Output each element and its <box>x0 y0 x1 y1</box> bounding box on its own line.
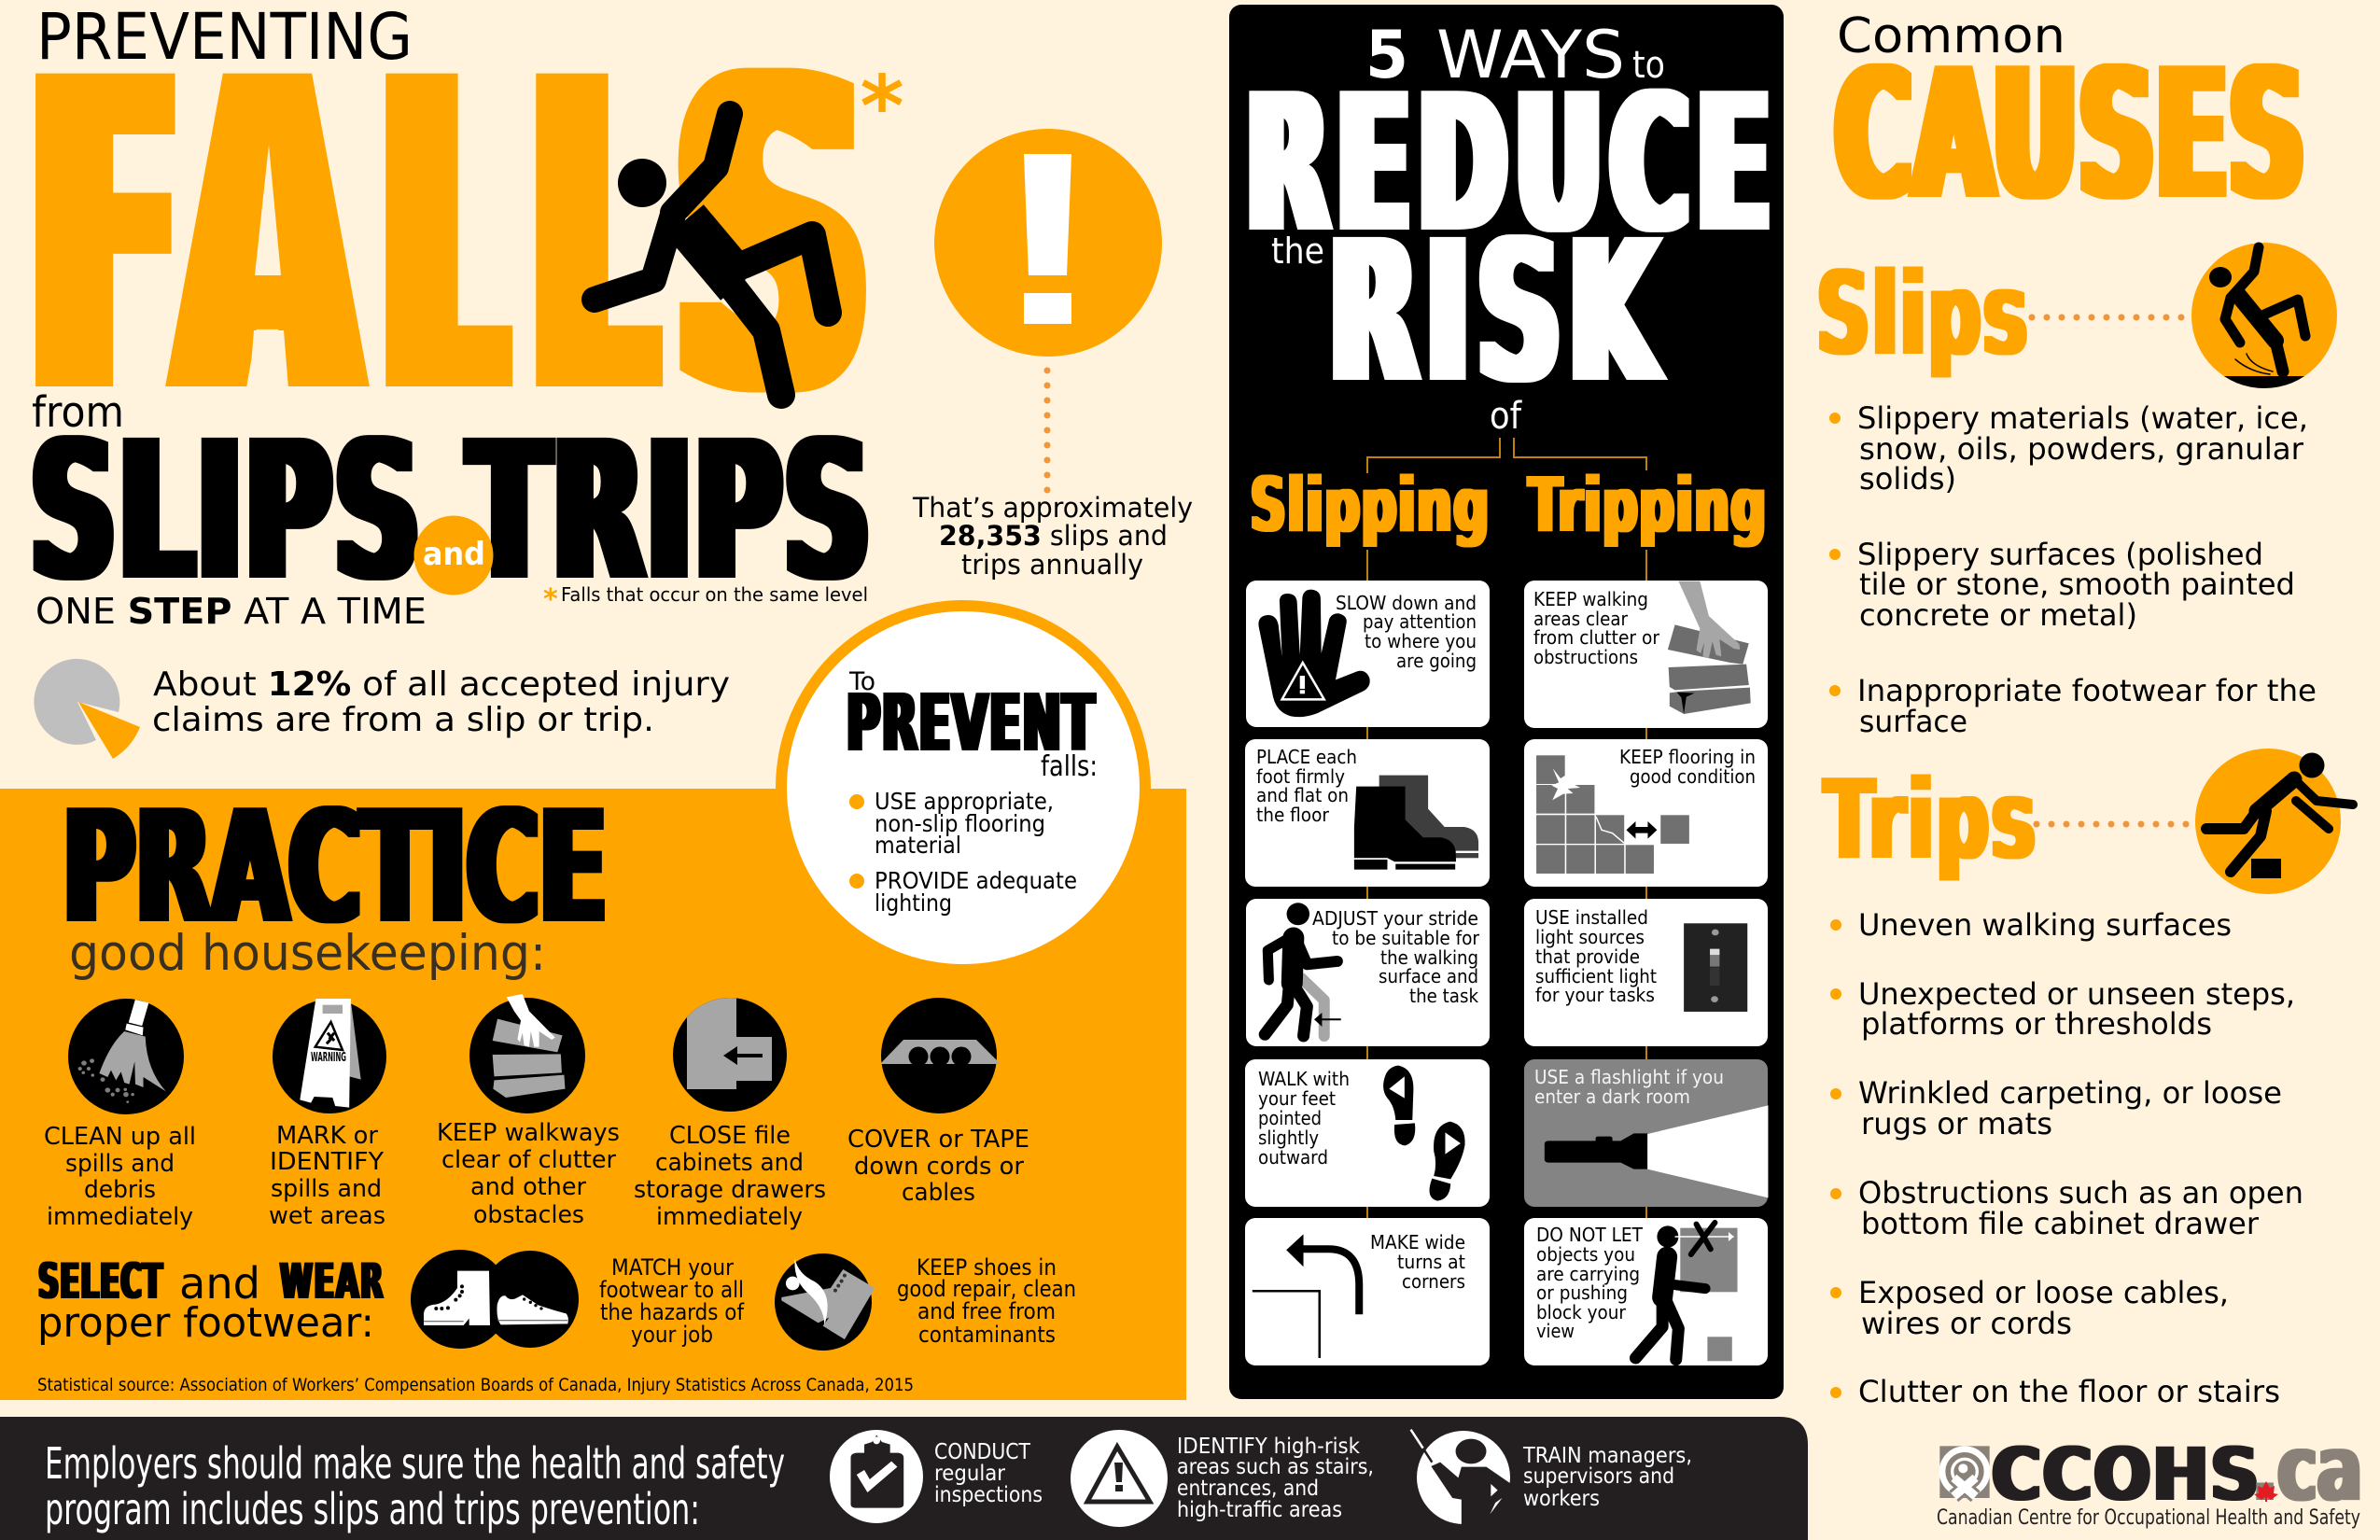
text: conduct: inspections <box>934 1483 1043 1507</box>
icon: warning sign <box>273 999 386 1113</box>
card: slow down: pay attention <box>1363 610 1477 633</box>
heading: select and wear: proper footwear: <box>37 1299 374 1347</box>
prevent circle <box>776 600 1151 975</box>
employers heading <box>45 1438 785 1534</box>
label: mark: wet areas <box>269 1202 385 1230</box>
icon: cable cover <box>880 998 1001 1113</box>
label: keep walkways: KEEP walkways <box>437 1119 620 1147</box>
card: adjust stride: to be suitable for <box>1332 927 1480 949</box>
heading: 5 ways to: WAYS <box>1436 17 1625 93</box>
card: keep flooring: KEEP flooring in <box>1619 746 1756 768</box>
label: clean <box>44 1123 196 1231</box>
list: trip causes: Uneven walking surfaces <box>1858 907 2232 943</box>
prevent circle: material <box>875 832 961 859</box>
panel: practice <box>0 600 1186 1400</box>
tagline: ONE STEP AT A TIME <box>35 591 427 632</box>
text: conduct <box>934 1440 1043 1507</box>
text: identify: entrances, and <box>1177 1477 1319 1501</box>
dotted connector: trips <box>2037 821 2193 827</box>
list: slip causes: surface <box>1859 704 1967 739</box>
list: trip causes: Exposed or loose cables, <box>1858 1275 2229 1310</box>
card: adjust stride: the walking <box>1380 946 1478 969</box>
card: walk with feet outward: WALK with <box>1258 1068 1350 1090</box>
heading: common: Common <box>1837 8 2065 64</box>
label: keep walkways: obstacles <box>473 1201 584 1229</box>
card: keep walking areas clear: from clutter or <box>1533 626 1660 649</box>
card: light sources: light sources <box>1535 926 1645 948</box>
text: identify: high-traffic areas <box>1177 1498 1342 1522</box>
card: adjust stride <box>1246 899 1490 1046</box>
logo: CCOHS <box>1937 1416 2362 1530</box>
label: close file: CLOSE file <box>669 1122 791 1150</box>
label: close file <box>634 1122 826 1231</box>
list: slip causes: Slippery surfaces (polished <box>1857 537 2263 572</box>
statistic: annual slips and trips <box>912 492 1193 581</box>
panel: five ways <box>1229 5 1784 1399</box>
card: wide turns <box>1245 1218 1490 1365</box>
source note: Statistical source: Association of Workers’ Compensation Boards of Canada, Injury Statistics Across Canada, 2015 <box>37 1375 914 1395</box>
employers heading: program includes slips and trips prevention: <box>45 1484 700 1534</box>
list: slip causes: snow, oils, powders, granular <box>1859 431 2304 467</box>
card: objects block view: objects you <box>1536 1243 1635 1266</box>
prevent circle: non-slip flooring <box>875 810 1045 837</box>
heading: trips: Trips <box>1825 755 2038 884</box>
label: match footwear: your job <box>631 1322 713 1348</box>
card: place each foot: PLACE each <box>1256 746 1357 768</box>
label: clean: spills and <box>65 1150 175 1178</box>
card: place each foot: the floor <box>1256 804 1330 826</box>
label: close file: immediately <box>656 1203 803 1231</box>
from: from <box>32 387 124 437</box>
dotted connector <box>1043 371 1051 493</box>
card: keep flooring <box>1524 739 1768 887</box>
prevent circle: USE appropriate, <box>875 788 1054 815</box>
statistic: annual slips and trips: 28,353 slips and <box>939 520 1168 552</box>
text: train: TRAIN managers, <box>1522 1444 1692 1468</box>
card: wide turns: corners <box>1402 1270 1465 1293</box>
heading: tripping: Tripping <box>1529 462 1768 550</box>
subheading: good housekeeping: good housekeeping: <box>69 925 546 982</box>
card: keep walking areas clear: KEEP walking <box>1533 588 1648 610</box>
label: mark <box>269 1122 385 1230</box>
list: slip causes: Slippery materials (water, ice, <box>1857 400 2308 436</box>
list: trip causes: bottom file cabinet drawer <box>1861 1206 2260 1241</box>
card: adjust stride: ADJUST your stride <box>1312 907 1478 930</box>
heading: practice: PRACTICE <box>63 777 608 959</box>
card: adjust stride: surface and <box>1379 965 1478 987</box>
label: keep walkways: and other <box>470 1173 586 1201</box>
card: slow down <box>1246 581 1490 727</box>
icon: boot and shoe <box>411 1250 579 1349</box>
card: flashlight: USE a flashlight if you <box>1534 1066 1724 1088</box>
list: trip causes <box>1830 907 2303 1409</box>
list: trip causes: Obstructions such as an open <box>1858 1175 2303 1211</box>
card: objects block view: are carrying <box>1536 1263 1640 1285</box>
and badge: and <box>423 536 485 573</box>
prevent circle: PREVENT <box>847 678 1096 770</box>
label: keep walkways: clear of clutter <box>441 1146 616 1174</box>
card: light sources: for your tasks <box>1535 984 1655 1006</box>
label: cover or tape: cables <box>902 1179 975 1207</box>
text: conduct: CONDUCT <box>934 1440 1031 1464</box>
exclamation circle <box>934 129 1162 357</box>
label: keep shoes: KEEP shoes in <box>917 1254 1057 1281</box>
title: falls <box>38 0 864 488</box>
heading: select and wear: and <box>179 1258 260 1309</box>
heading: select and wear <box>37 1253 385 1347</box>
footnote: * <box>543 583 558 616</box>
card: keep walking areas clear: obstructions <box>1533 646 1638 668</box>
label: match footwear: footwear to all <box>599 1277 744 1303</box>
list: trip causes: rugs or mats <box>1861 1106 2052 1141</box>
card: flashlight: enter a dark room <box>1534 1085 1690 1108</box>
label: keep shoes: and free from <box>917 1298 1056 1324</box>
card: walk with feet outward: pointed <box>1258 1107 1322 1129</box>
heading: 5 ways to: 5 <box>1365 17 1408 93</box>
icon: trainer <box>1411 1430 1520 1526</box>
list: trip causes: platforms or thresholds <box>1861 1006 2212 1042</box>
card: light sources: USE installed <box>1535 906 1648 929</box>
label: match footwear: the hazards of <box>600 1299 744 1325</box>
list: slip causes: Inappropriate footwear for the <box>1857 673 2317 708</box>
card: wide turns: MAKE wide <box>1370 1231 1465 1253</box>
label: cover or tape <box>847 1126 1029 1207</box>
card: objects block view: view <box>1536 1320 1575 1342</box>
bracket connectors <box>1367 438 1646 1218</box>
asterisk: * <box>860 58 904 156</box>
heading: select and wear: SELECT <box>38 1253 163 1310</box>
icon: shoe care <box>775 1253 875 1351</box>
label: keep walkways <box>437 1119 620 1229</box>
label: keep shoes <box>897 1254 1076 1348</box>
card: place each foot <box>1245 739 1490 887</box>
text: train: workers <box>1523 1487 1600 1511</box>
card: wide turns: turns at <box>1397 1251 1465 1273</box>
card: flashlight <box>1524 1059 1768 1207</box>
claims statistic: claims are from a slip or trip. <box>152 701 654 739</box>
card: light sources <box>1524 899 1768 1046</box>
falling figure <box>595 114 828 395</box>
icon: broom <box>68 999 184 1114</box>
title: falls: S <box>680 0 864 488</box>
heading: reduce: REDUCE <box>1247 54 1779 275</box>
title: falls: L <box>541 0 647 488</box>
footnote <box>543 583 868 616</box>
text: identify <box>1177 1435 1374 1522</box>
card: walk with feet outward: your feet <box>1258 1087 1336 1110</box>
card: light sources: that provide <box>1535 945 1640 968</box>
heading: slipping: Slipping <box>1251 462 1491 550</box>
list: trip causes: Clutter on the floor or stairs <box>1858 1374 2280 1409</box>
card: objects block view: block your <box>1536 1301 1627 1323</box>
icon: file cabinet <box>673 989 787 1112</box>
and badge <box>414 515 493 595</box>
title: slips: SLIPS <box>32 399 424 623</box>
card: walk with feet outward: outward <box>1258 1146 1328 1169</box>
employers heading: Employers should make sure the health and safety <box>45 1438 785 1489</box>
icon: slipping figure <box>2191 243 2337 388</box>
title: trips: TRIPS <box>469 399 874 623</box>
icon: warning sign: WARNING <box>311 1051 346 1065</box>
label: cover or tape: COVER or TAPE <box>847 1126 1029 1154</box>
title: falls: A <box>185 0 352 488</box>
logo: CCOHS: CCOHS <box>1992 1434 2261 1518</box>
list: slip causes <box>1829 400 2317 739</box>
card: keep walking areas clear <box>1524 581 1768 728</box>
heading: 5 ways to: to <box>1632 44 1665 87</box>
label: close file: cabinets and <box>655 1149 804 1177</box>
heading: select and wear: WEAR <box>280 1253 385 1310</box>
card: slow down: to where you <box>1365 630 1477 652</box>
label: clean: immediately <box>47 1203 193 1231</box>
card: keep walking areas clear: areas clear <box>1533 608 1629 630</box>
label: match footwear: MATCH your <box>611 1254 734 1281</box>
list: trip causes: Wrinkled carpeting, or loose <box>1858 1075 2282 1111</box>
card: objects block view: or pushing <box>1536 1281 1628 1304</box>
footnote: Falls that occur on the same level <box>561 583 868 606</box>
label: cover or tape: down cords or <box>854 1153 1024 1181</box>
prevent circle: falls: <box>1041 750 1098 783</box>
dotted connector: slips <box>2032 314 2189 321</box>
card: light sources: sufficient light <box>1535 965 1657 987</box>
label: mark: IDENTIFY <box>270 1148 384 1176</box>
heading: slips: Slips <box>1817 248 2030 382</box>
panel: employers bar <box>0 1417 1808 1540</box>
icon: warning triangle <box>1071 1430 1168 1527</box>
icon: clipboard <box>830 1430 923 1523</box>
statistic: annual slips and trips: That’s approximately <box>912 492 1193 524</box>
word: the: the <box>1271 231 1324 272</box>
icon: lifting clutter <box>469 994 585 1113</box>
icon: tripping figure <box>2195 749 2353 894</box>
label: clean: CLEAN up all <box>44 1123 196 1151</box>
list: slip causes: tile or stone, smooth painted <box>1859 567 2295 602</box>
text: train: supervisors and <box>1523 1464 1674 1489</box>
card: slow down: SLOW down and <box>1336 592 1477 614</box>
list: slip causes: solids) <box>1859 461 1956 497</box>
claims statistic <box>152 665 730 739</box>
title: falls: L <box>391 0 497 488</box>
label: keep shoes: good repair, clean <box>897 1276 1076 1302</box>
prevent circle: PROVIDE adequate <box>875 867 1077 894</box>
title: falls: F <box>38 0 171 488</box>
pie chart: 12 percent <box>34 659 140 759</box>
list: trip causes: wires or cords <box>1861 1306 2072 1341</box>
label: close file: storage drawers <box>634 1176 826 1204</box>
heading: risk: RISK <box>1330 198 1667 427</box>
card: objects block view <box>1524 1218 1768 1365</box>
text: identify: IDENTIFY high-risk <box>1177 1435 1361 1459</box>
list: trip causes: Unexpected or unseen steps, <box>1858 976 2295 1012</box>
text: conduct: regular <box>934 1462 1006 1486</box>
title: preventing: PREVENTING <box>36 0 413 75</box>
prevent circle: lighting <box>875 889 952 917</box>
card: slow down: are going <box>1396 650 1477 672</box>
card: place each foot: and flat on <box>1256 784 1349 806</box>
claims statistic: About 12% of all accepted injury <box>153 665 730 704</box>
prevent circle: To <box>848 667 875 696</box>
card: place each foot: foot firmly <box>1256 765 1345 788</box>
card: walk with feet outward: slightly <box>1258 1127 1319 1149</box>
text: train <box>1522 1444 1692 1511</box>
label: mark: MARK or <box>276 1122 378 1150</box>
text: identify: areas such as stairs, <box>1177 1455 1374 1479</box>
statistic: annual slips and trips: trips annually <box>961 549 1143 581</box>
card: objects block view: DO NOT LET <box>1536 1224 1644 1246</box>
card: keep flooring: good condition <box>1630 765 1756 788</box>
label: mark: spills and <box>271 1175 382 1203</box>
word: of: of <box>1490 395 1522 438</box>
heading: 5 ways to <box>1365 17 1665 93</box>
list: slip causes: concrete or metal) <box>1859 597 2137 633</box>
label: match footwear <box>599 1254 744 1348</box>
card: walk with feet outward <box>1245 1059 1490 1207</box>
label: clean: debris <box>84 1176 156 1204</box>
card: adjust stride: the task <box>1409 985 1478 1007</box>
label: keep shoes: contaminants <box>918 1322 1056 1348</box>
